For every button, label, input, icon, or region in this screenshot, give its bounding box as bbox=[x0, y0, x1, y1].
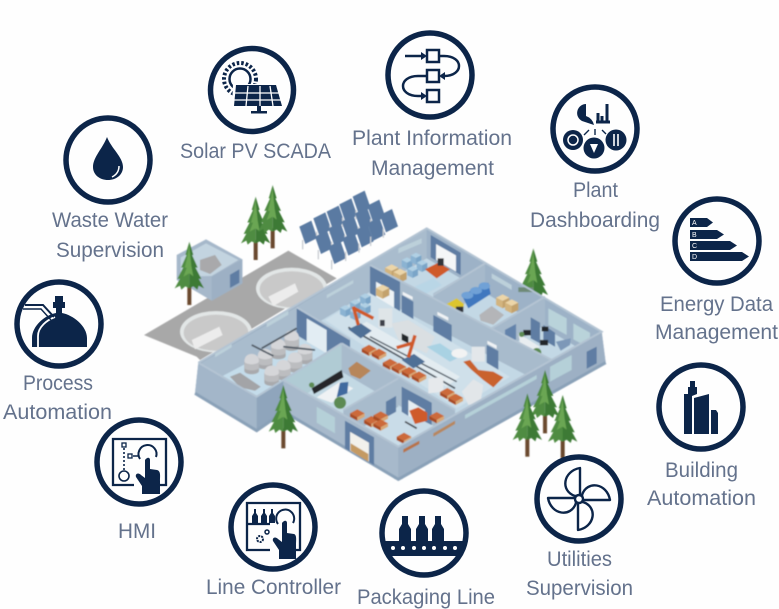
label: Utilities bbox=[547, 548, 612, 571]
door into upper room bbox=[431, 235, 461, 275]
label: Solar PV SCADA bbox=[180, 140, 331, 163]
icon: energy rating bars: A bbox=[692, 220, 697, 227]
icon: water drop bbox=[66, 118, 150, 202]
main partition wall bbox=[370, 265, 552, 388]
tree beside shed bbox=[175, 242, 204, 305]
label: Management bbox=[371, 157, 494, 180]
exterior details bbox=[317, 347, 597, 465]
foreground trees bbox=[269, 370, 577, 458]
plinth line bbox=[195, 363, 606, 479]
control room furniture bbox=[293, 362, 371, 409]
small pump shed bbox=[177, 239, 242, 301]
icon: solar panel and sun bbox=[210, 48, 294, 132]
inner wall around control room bbox=[283, 343, 455, 438]
label: Process bbox=[23, 372, 93, 395]
clarifier tank: front bbox=[180, 311, 252, 352]
label bbox=[655, 293, 778, 344]
item: Utilities Supervision bbox=[526, 457, 633, 600]
item: Plant Information Management bbox=[352, 33, 512, 180]
control room partition bbox=[343, 378, 398, 438]
label: Management bbox=[655, 321, 778, 344]
icon: process flow bbox=[388, 33, 472, 117]
label: Supervision bbox=[56, 239, 164, 262]
item: Process Automation bbox=[3, 282, 112, 424]
icon: energy rating bars: D bbox=[692, 254, 697, 261]
item: Plant Dashboarding bbox=[530, 87, 660, 232]
label: Dashboarding bbox=[530, 209, 660, 232]
item: Packaging Line bbox=[357, 491, 495, 609]
icon: energy rating bars: B bbox=[692, 232, 697, 239]
label: Automation bbox=[3, 401, 112, 424]
item: Solar PV SCADA bbox=[180, 48, 331, 163]
illustration: isometric factory plant bbox=[144, 185, 606, 479]
icon: fan bbox=[537, 457, 621, 541]
item: Building Automation bbox=[647, 365, 756, 510]
icon: dashboard charts bbox=[553, 87, 637, 171]
rear wall faces bbox=[202, 228, 602, 391]
icon: brew kettle bbox=[17, 282, 101, 366]
production line bbox=[325, 293, 510, 408]
label bbox=[647, 459, 756, 510]
label: Automation bbox=[647, 487, 756, 510]
icon: touch screen bbox=[97, 420, 181, 504]
storage room contents bbox=[350, 387, 444, 444]
storage room floor bbox=[343, 407, 455, 447]
front wall: left wing bbox=[195, 363, 257, 431]
wastewater slab bbox=[144, 251, 337, 360]
front wall: control and storage side bbox=[283, 380, 398, 479]
label bbox=[530, 179, 660, 232]
item: Line Controller bbox=[206, 485, 341, 599]
label: Waste Water bbox=[52, 209, 168, 232]
room contents: storage upper bbox=[385, 253, 450, 295]
solar array bbox=[299, 191, 398, 269]
icon: energy rating bars: C bbox=[692, 243, 697, 250]
tree behind building bbox=[519, 248, 548, 312]
room contents: office bbox=[505, 317, 571, 357]
process tank room bbox=[215, 307, 350, 397]
control room floor bbox=[283, 372, 398, 438]
clarifier tank: rear bbox=[256, 268, 327, 309]
label bbox=[3, 372, 112, 424]
label: Plant bbox=[573, 179, 618, 202]
label: HMI bbox=[118, 520, 156, 543]
label: Line Controller bbox=[206, 576, 341, 599]
front wall: left wing return bbox=[257, 380, 284, 431]
label: Plant Information bbox=[352, 127, 512, 150]
room contents: tank farm and boxes bbox=[447, 282, 533, 325]
label: Supervision bbox=[526, 577, 633, 600]
front wall: long right side bbox=[398, 332, 606, 479]
building floor bbox=[203, 230, 602, 447]
label: Energy Data bbox=[660, 293, 773, 316]
label: Building bbox=[665, 459, 738, 482]
partition doors bbox=[370, 266, 498, 370]
label: Packaging Line bbox=[357, 586, 495, 609]
item: HMI bbox=[97, 420, 181, 543]
item: Waste Water Supervision bbox=[52, 118, 168, 262]
icon: bottles on conveyor bbox=[382, 491, 466, 575]
item: Energy Data Management bbox=[655, 199, 778, 344]
label bbox=[526, 548, 633, 600]
icon: line control panel bbox=[231, 485, 315, 569]
building base bbox=[195, 228, 606, 479]
icon: office buildings bbox=[659, 365, 743, 449]
wall caps bbox=[198, 228, 602, 447]
trees by the solar array bbox=[241, 185, 287, 260]
label bbox=[52, 209, 168, 262]
partition faces bbox=[433, 263, 545, 357]
label bbox=[352, 127, 512, 180]
icon: energy rating bars bbox=[675, 199, 759, 283]
